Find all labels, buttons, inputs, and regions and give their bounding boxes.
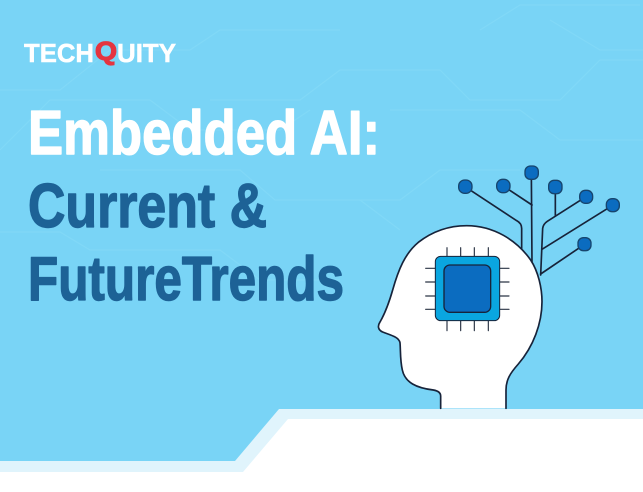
head silhouette <box>378 226 542 408</box>
bottom white panel <box>0 419 643 492</box>
title line: Current &: Current & <box>28 172 267 241</box>
logo: TECHQUITY: Q <box>95 36 117 66</box>
bottom light band <box>0 409 643 492</box>
title line: Embedded AI: Embedded AI: <box>28 99 380 168</box>
logo: TECHQUITY <box>24 36 176 68</box>
chip body <box>435 256 500 321</box>
chip pins <box>426 248 509 331</box>
circuit branches <box>466 173 613 275</box>
title line: FutureTrends: FutureTrends <box>28 245 344 314</box>
circuit nodes <box>459 166 619 251</box>
chip core <box>444 265 491 312</box>
logo: TECHQUITY: TECH <box>24 38 94 68</box>
logo: TECHQUITY: UITY <box>117 38 176 68</box>
title <box>28 99 380 314</box>
illustration: head with chip and circuit branches <box>378 166 619 408</box>
